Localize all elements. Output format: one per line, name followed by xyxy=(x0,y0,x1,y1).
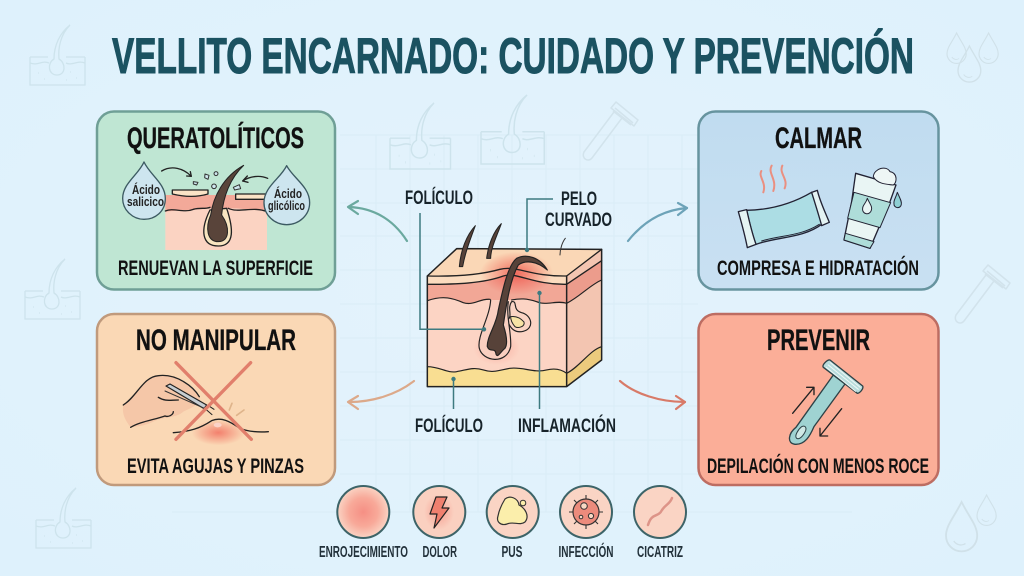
heading: prevenir: PREVENIR xyxy=(767,324,870,357)
label: folículo top: FOLÍCULO xyxy=(405,187,473,209)
leader: pelo curvado xyxy=(525,199,553,252)
heading: no manipular: NO MANIPULAR xyxy=(136,324,296,357)
label: cicatriz: CICATRIZ xyxy=(637,544,683,561)
panel: calmar xyxy=(698,112,938,290)
follicle xyxy=(479,300,511,359)
label: folículo bottom: FOLÍCULO xyxy=(415,415,483,437)
leader: folículo bottom xyxy=(451,377,456,409)
panel: queratolíticos xyxy=(97,112,335,290)
illustration: follicle and exfoliation xyxy=(123,162,310,250)
icon: warm compress xyxy=(738,166,901,248)
label: inflamación: INFLAMACIÓN xyxy=(518,415,616,437)
gland xyxy=(507,302,531,332)
background grid xyxy=(172,135,852,512)
heading: calmar: CALMAR xyxy=(775,122,862,155)
symptom icons row xyxy=(319,486,686,561)
diagram: skin cross-section xyxy=(427,224,602,387)
icon: hydration tube xyxy=(844,168,901,248)
leader: inflamación xyxy=(537,291,542,409)
right face xyxy=(567,249,602,387)
panel: no manipular xyxy=(97,314,335,485)
icon: dolor xyxy=(413,486,465,538)
arrow: to queratolíticos xyxy=(348,201,407,241)
label: pus: PUS xyxy=(502,544,522,561)
ingrown hair xyxy=(487,256,547,356)
label: ácido salicílico: salicico xyxy=(127,195,164,209)
label: ácido glicólico: glicólico xyxy=(268,199,305,213)
icon: razor with arrows xyxy=(789,360,863,444)
icon: pus xyxy=(487,486,539,538)
caption: renuevan la superficie: RENUEVAN LA SUPERFICIE xyxy=(118,257,313,280)
leader: folículo top xyxy=(420,213,486,331)
front face xyxy=(427,276,567,387)
icon: cicatriz xyxy=(634,486,686,538)
inflammation glow xyxy=(480,252,553,295)
label: infección: INFECCIÓN xyxy=(558,543,614,561)
caption: evita agujas y pinzas: EVITA AGUJAS Y PINZAS xyxy=(127,455,304,478)
outlines xyxy=(427,249,602,387)
top face xyxy=(427,249,602,276)
illustration: hand with tweezers crossed out xyxy=(123,363,268,445)
label: ácido salicílico xyxy=(127,182,164,209)
label: ácido glicólico xyxy=(268,186,305,213)
arrow: to no manipular xyxy=(348,381,414,409)
label: enrojecimiento: ENROJECIMIENTO xyxy=(319,544,408,561)
icon: enrojecimiento xyxy=(337,486,389,538)
label: pelo curvado xyxy=(545,189,612,231)
icon: infección xyxy=(560,486,612,538)
label: pelo curvado: PELO xyxy=(561,189,597,210)
caption: compresa e hidratación: COMPRESA E HIDRATACIÓN xyxy=(717,256,919,280)
label: ácido salicílico: Ácido xyxy=(132,182,160,197)
arrow: to prevenir xyxy=(620,381,685,409)
heading: queratolíticos: QUERATOLÍTICOS xyxy=(127,121,304,155)
label: ácido glicólico: Ácido xyxy=(274,186,302,201)
label: pelo curvado: CURVADO xyxy=(545,210,612,231)
surface hairs xyxy=(459,226,475,267)
panel: prevenir xyxy=(698,314,938,485)
arrow: to calmar xyxy=(628,203,687,241)
label: dolor: DOLOR xyxy=(422,544,457,561)
